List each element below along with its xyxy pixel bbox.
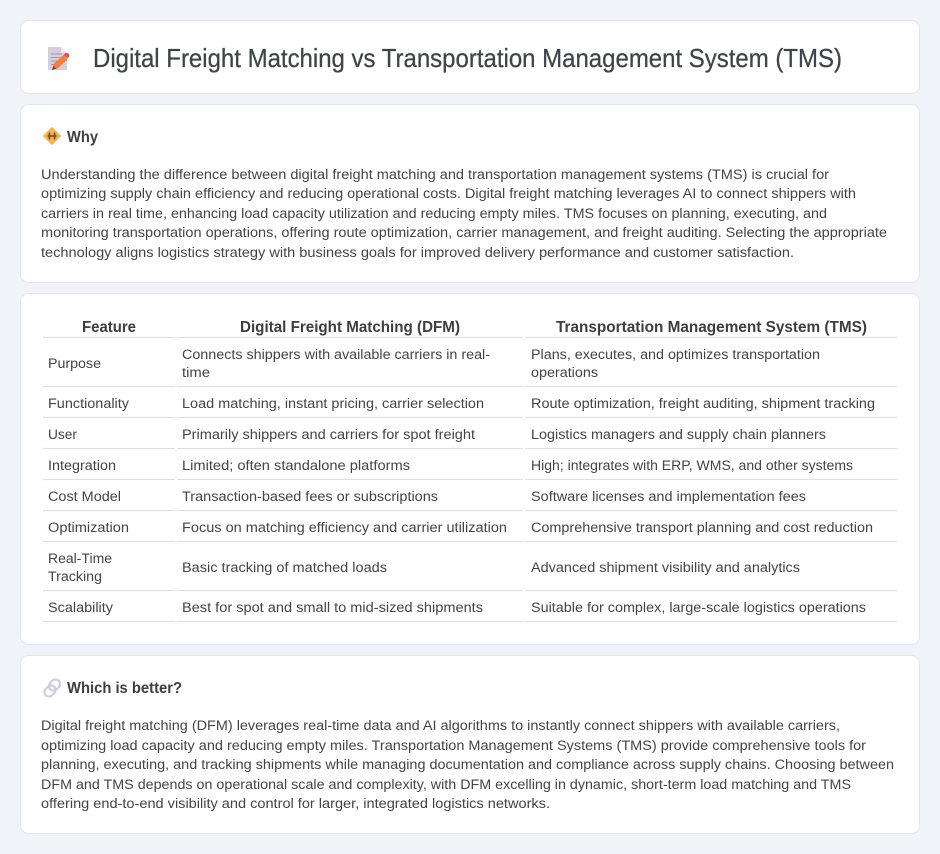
row: real-time tracking xyxy=(43,551,897,590)
row: optimization: Optimization xyxy=(48,520,129,536)
row: integration xyxy=(43,458,897,480)
row: scalability: Scalability xyxy=(48,600,114,616)
icon: document with pencil xyxy=(48,47,69,70)
icon: road sign diamond xyxy=(44,128,60,144)
text block: why body: monitoring transportation operations, offering route optimization, carrier management, and freight auditing. Selecting the appropriate xyxy=(41,225,887,241)
row: optimization xyxy=(43,520,897,542)
row: real-time tracking: Advanced shipment visibility and analytics xyxy=(531,560,800,576)
row: functionality: Load matching, instant pricing, carrier selection xyxy=(182,396,484,412)
text block: which is better body: optimizing load capacity and reducing empty miles. Transportation Management Systems (TMS) provide comprehensive tools for xyxy=(41,738,866,754)
row: scalability xyxy=(43,600,897,622)
row: cost model: Software licenses and implementation fees xyxy=(531,489,806,505)
text block: why body xyxy=(41,167,887,261)
icon: chain link xyxy=(43,678,62,698)
text block: why body: optimizing supply chain efficiency and reducing operational costs. Digital freight matching leverages AI to connect shippers with xyxy=(41,186,856,202)
table header row: Digital Freight Matching (DFM) xyxy=(240,319,460,336)
text block: why body: carriers in real time, enhancing load capacity utilization and reducing empty miles. TMS focuses on planning, executing, and xyxy=(41,206,827,222)
text block: which is better body: Digital freight matching (DFM) leverages real-time data and AI algorithms to instantly connect shippers with available carriers, xyxy=(41,718,840,734)
row: real-time tracking: Real-Time xyxy=(48,551,112,567)
table header row xyxy=(43,319,897,338)
panel: comparison table xyxy=(20,294,920,644)
row: purpose xyxy=(43,347,897,386)
text block: which is better body: DFM and TMS depends on operational scale and complexity, with DFM excelling in dynamic, short-term load matching and TMS xyxy=(41,777,851,793)
row: user: User xyxy=(48,427,77,443)
row: scalability: Suitable for complex, large-scale logistics operations xyxy=(531,600,866,616)
text block: why body: technology aligns logistics strategy with business goals for improved delivery performance and customer satisfaction. xyxy=(41,245,794,261)
row: integration: Integration xyxy=(48,458,116,474)
row: scalability: Best for spot and small to mid-sized shipments xyxy=(182,600,483,616)
row: integration: Limited; often standalone platforms xyxy=(182,458,410,474)
row: user: Logistics managers and supply chain planners xyxy=(531,427,826,443)
row: integration: High; integrates with ERP, WMS, and other systems xyxy=(531,458,853,474)
panel: why xyxy=(20,104,920,282)
table header row: Transportation Management System (TMS) xyxy=(556,319,867,336)
row: purpose: Connects shippers with available carriers in real- xyxy=(182,347,490,363)
text block: which is better body xyxy=(41,718,894,812)
row: purpose: time xyxy=(182,365,210,381)
panel: title header xyxy=(20,20,920,94)
row: purpose: operations xyxy=(531,365,598,381)
row: optimization: Comprehensive transport planning and cost reduction xyxy=(531,520,873,536)
table header row: Feature xyxy=(82,319,136,336)
row: functionality: Functionality xyxy=(48,396,130,412)
row: real-time tracking: Basic tracking of matched loads xyxy=(182,560,387,576)
text block: which is better body: offering end-to-end visibility and control for larger, integrated logistics networks. xyxy=(41,796,550,812)
row: user: Primarily shippers and carriers for spot freight xyxy=(182,427,475,443)
row: functionality: Route optimization, freight auditing, shipment tracking xyxy=(531,396,875,412)
text block: which is better body: planning, executing, and tracking shipments while managing documentation and compliance across supply chains. Choosing between xyxy=(41,757,894,773)
row: cost model: Transaction-based fees or subscriptions xyxy=(182,489,438,505)
panel: which is better xyxy=(20,656,920,834)
row: real-time tracking: Tracking xyxy=(48,569,102,585)
row: functionality xyxy=(43,396,897,418)
row: purpose: Plans, executes, and optimizes transportation xyxy=(531,347,820,363)
heading: which is better: Which is better? xyxy=(67,680,182,697)
title: Digital Freight Matching vs Transportation Management System (TMS) xyxy=(93,45,842,73)
text block: why body: Understanding the difference between digital freight matching and transportation management systems (TMS) is crucial for xyxy=(41,167,829,183)
row: optimization: Focus on matching efficiency and carrier utilization xyxy=(182,520,507,536)
row: purpose: Purpose xyxy=(48,356,101,372)
row: cost model xyxy=(43,489,897,510)
row: user xyxy=(43,427,897,448)
row: cost model: Cost Model xyxy=(48,489,121,505)
heading: why: Why xyxy=(67,129,98,146)
